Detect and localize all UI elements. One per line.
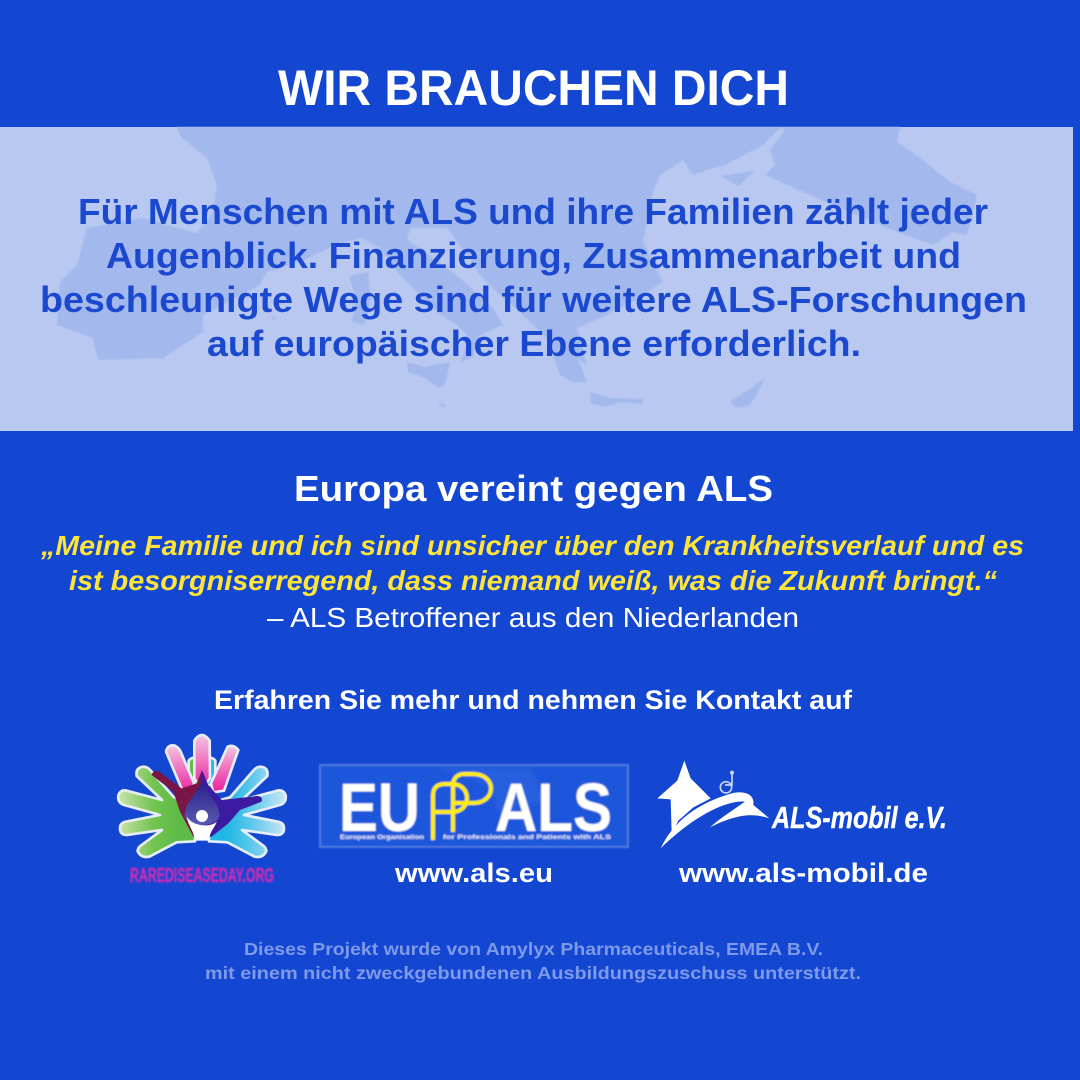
contact heading: Erfahren Sie mehr und nehmen Sie Kontakt auf	[214, 685, 853, 715]
body text: Augenblick. Finanzierung, Zusammenarbeit und	[106, 235, 961, 276]
logo: EUpALS: European Organisation	[340, 835, 424, 841]
person figure	[187, 810, 217, 841]
map of Europe	[57, 127, 977, 408]
logo caption: RAREDISEASEDAY.ORG	[130, 865, 274, 887]
body text: beschleunigte Wege sind für weitere ALS-Forschungen	[40, 279, 1027, 320]
body text: auf europäischer Ebene erforderlich.	[207, 323, 861, 364]
body text	[40, 191, 1027, 364]
sponsor note: mit einem nicht zweckgebundenen Ausbildungszuschuss unterstützt.	[205, 963, 861, 983]
title: WIR BRAUCHEN DICH	[278, 60, 789, 116]
logo: EUpALS: ALS	[495, 769, 612, 846]
logo: EUpALS: for Professionals and Patients with ALS	[443, 835, 611, 841]
sponsor note	[205, 939, 861, 983]
sponsor note: Dieses Projekt wurde von Amylyx Pharmaceuticals, EMEA B.V.	[244, 939, 823, 959]
logo: ALS-mobil	[657, 761, 947, 888]
logo wordmark: ALS-mobil e.V.	[771, 800, 947, 835]
quote	[40, 530, 1024, 633]
logo caption: www.als-mobil.de	[678, 858, 928, 888]
body text: Für Menschen mit ALS und ihre Familien zählt jeder	[78, 191, 988, 232]
quote: „Meine Familie und ich sind unsicher über den Krankheitsverlauf und es	[40, 530, 1024, 561]
panel: call to action with Europe map	[0, 127, 1073, 431]
logo: EUpALS: EU	[339, 769, 420, 846]
logo: Rare Disease Day	[118, 735, 286, 887]
subheading: Europa vereint gegen ALS	[294, 468, 773, 509]
quote: – ALS Betroffener aus den Niederlanden	[267, 602, 799, 633]
logo caption: www.als.eu	[394, 858, 553, 888]
logo: EUpALS	[320, 765, 628, 888]
quote: ist besorgniserregend, dass niemand weiß, was die Zukunft bringt.“	[69, 565, 997, 596]
